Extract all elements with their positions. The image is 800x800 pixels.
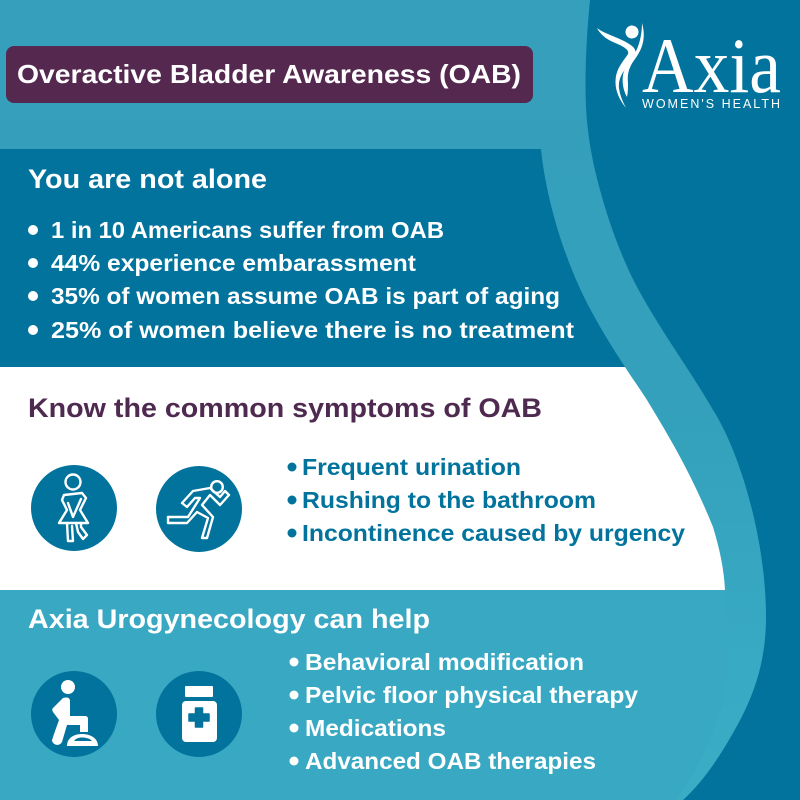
panel: axia can help — [0, 590, 729, 800]
bullet list: statistics — [28, 217, 574, 343]
icon: woman needing to urinate — [31, 465, 117, 551]
symptoms list: Frequent urination — [302, 454, 521, 480]
panel: common symptoms — [0, 367, 725, 590]
icon: figure — [597, 23, 644, 108]
icon: running person — [156, 466, 242, 552]
symptoms list — [288, 454, 685, 546]
heading: axia urogynecology can help: Axia Urogynecology can help — [28, 604, 430, 634]
title banner — [6, 46, 533, 103]
help list: Behavioral modification — [305, 649, 584, 675]
bullet list: statistics: 25% of women believe there is no treatment — [51, 317, 574, 343]
help list — [290, 649, 638, 774]
logo: Axia Women's Health — [597, 22, 781, 111]
symptoms list: Incontinence caused by urgency — [302, 520, 685, 546]
help list: Medications — [305, 715, 446, 741]
bullet list: statistics: 44% experience embarassment — [51, 250, 416, 276]
logo tagline: WOMEN'S HEALTH — [642, 97, 780, 111]
icon: pelvic floor exercise — [31, 671, 117, 757]
heading: common symptoms: Know the common symptoms of OAB — [28, 393, 542, 423]
logo wordmark: Axia — [642, 22, 781, 109]
title: Overactive Bladder Awareness (OAB) — [17, 59, 521, 89]
bullet list: statistics: 35% of women assume OAB is part of aging — [51, 283, 560, 309]
help list: Pelvic floor physical therapy — [305, 682, 638, 708]
icon: medicine bottle — [156, 671, 242, 757]
heading: you are not alone: You are not alone — [28, 164, 267, 194]
panel: you are not alone — [0, 149, 625, 367]
help list: Advanced OAB therapies — [305, 748, 596, 774]
bullet list: statistics: 1 in 10 Americans suffer from OAB — [51, 217, 444, 243]
symptoms list: Rushing to the bathroom — [302, 487, 596, 513]
